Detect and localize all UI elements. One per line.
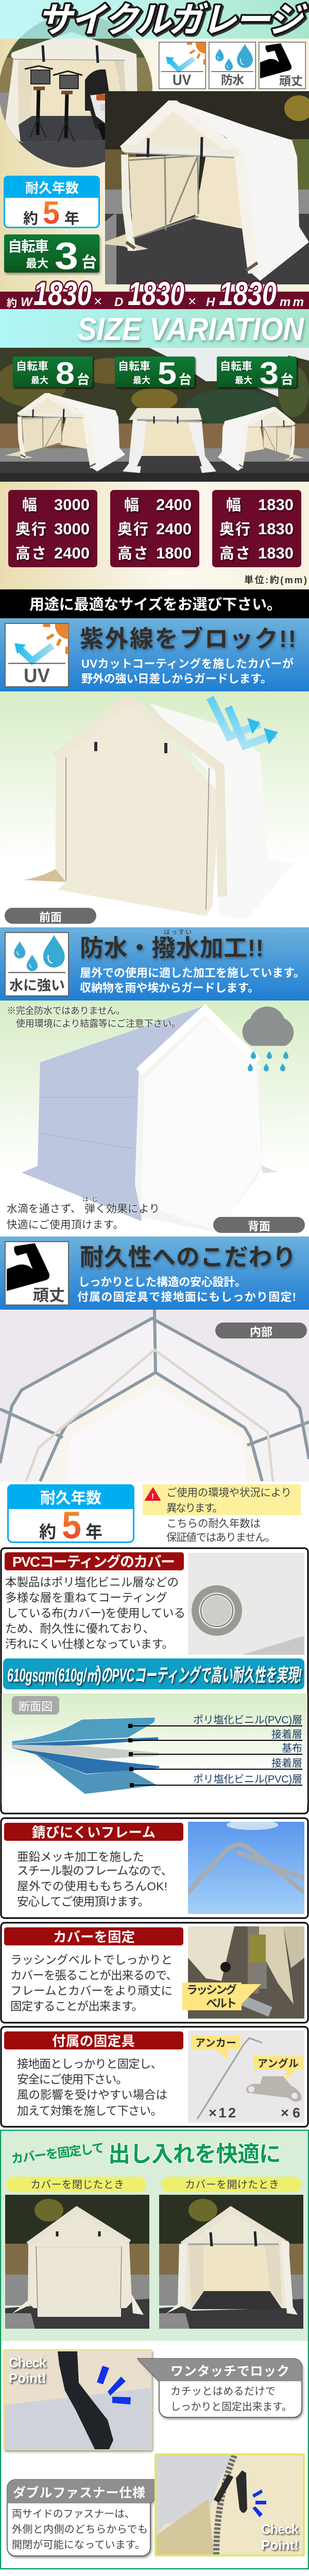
badge: 3 bikes: 台 <box>281 372 294 387</box>
waterproof description <box>80 967 305 994</box>
waterproof description: 屋外での使用に適した加工を施しています。 <box>80 967 305 979</box>
dimension bar: H <box>206 295 215 309</box>
icon: UV <box>159 42 205 89</box>
badge: 5 bikes: 自転車 <box>118 361 150 372</box>
warning note: 保証値ではありません。 <box>166 1532 276 1544</box>
fixtures title <box>4 2031 183 2049</box>
fixing text <box>10 1954 178 2013</box>
size table: 3000: 幅 <box>22 497 37 514</box>
illustration: garage front closed <box>24 698 294 920</box>
icon: water resistant <box>5 933 68 996</box>
size table: 3000: 3000 <box>54 520 90 538</box>
fixing text: カバーを張ることが出来るので、 <box>10 1969 178 1982</box>
bicycle capacity badge: 台 <box>81 254 97 271</box>
waterproof header <box>0 927 309 1001</box>
label: cross section: 断面図 <box>19 1700 53 1713</box>
fixtures text: 風の影響を受けやすい場合は <box>17 2089 167 2102</box>
size table background <box>0 482 309 589</box>
waterproof feature section <box>0 927 309 1233</box>
PVC text: 汚れにくい仕様となっています。 <box>5 1638 174 1651</box>
size table: 3000 <box>8 490 97 567</box>
illustration: garage back <box>22 1006 278 1232</box>
label: back <box>213 1217 305 1233</box>
durability description <box>77 1276 296 1303</box>
UV description <box>81 657 294 685</box>
PVC text: している布(カバー)を使用している <box>6 1607 185 1620</box>
fixing title <box>4 1927 183 1945</box>
icon: UV: UV <box>173 72 192 89</box>
dimension bar <box>0 275 309 312</box>
badge: 5 bikes: 5 <box>158 356 177 391</box>
icon: UV block <box>5 623 68 687</box>
hero cream background <box>0 39 309 292</box>
callout: double zipper <box>7 2480 171 2556</box>
callout: one touch lock <box>138 2359 302 2417</box>
note: not fully waterproof: 使用環境により結露等にご注意下さい。 <box>16 1019 181 1029</box>
diagram labels: 接着層 <box>271 1728 302 1740</box>
dimension bar: mm <box>280 295 304 309</box>
bicycle capacity badge: 3 <box>55 234 78 277</box>
callout: angle <box>253 2056 303 2081</box>
UV feature section <box>0 618 309 924</box>
bicycle capacity badge <box>4 234 99 277</box>
photo: garage with bicycles in circle <box>0 10 154 170</box>
badge: 5 bikes: 台 <box>179 372 192 387</box>
diagram labels <box>193 1714 302 1785</box>
callout: double zipper: 両サイドのファスナーは、 <box>12 2509 135 2520</box>
panel: PVC cover <box>0 1548 309 1815</box>
waterproof caption: 快適にご使用頂けます。 <box>7 1219 124 1231</box>
UV header <box>0 618 309 691</box>
fixtures text: 安全にご使用下さい。 <box>17 2073 128 2086</box>
bicycle capacity badge: 最大 <box>26 257 48 270</box>
dimension bar: × <box>188 293 196 309</box>
check point: buckle: Point! <box>9 2370 46 2386</box>
heading: fix the cover: カバーを固定して <box>10 2141 105 2166</box>
diagram: layers <box>12 1717 159 1794</box>
size table: 1830: 幅 <box>226 497 241 514</box>
panel: DIY and gardening <box>0 2571 309 2576</box>
photo: cover closed <box>5 2195 149 2329</box>
icon: rain cloud <box>243 1007 294 1072</box>
photo: grommet <box>188 1553 304 1655</box>
panel: cover fixing <box>0 1922 309 2024</box>
size table: 1830: 1830 <box>258 496 294 514</box>
callout: double zipper: ダブルファスナー仕様 <box>13 2485 145 2500</box>
size table: 3000: 高さ <box>15 545 46 562</box>
callout: one touch lock: しっかりと固定出来ます。 <box>170 2401 292 2413</box>
black message bar <box>0 589 309 618</box>
diagram labels: ポリ塩化ビニル(PVC)層 <box>193 1714 302 1726</box>
frame text <box>17 1851 173 1908</box>
badge: 3 bikes: 自転車 <box>220 361 252 372</box>
label: cover closed: カバーを閉じたとき <box>30 2179 124 2191</box>
size variation heading band <box>0 309 309 348</box>
badge: 8 bikes <box>13 356 93 391</box>
check point: zipper: Point! <box>261 2537 299 2553</box>
size table: 3000: 奥行 <box>15 521 46 538</box>
bicycle capacity badge: 自転車 <box>8 239 49 255</box>
size table: 1830: 高さ <box>219 545 250 562</box>
diagram labels: 接着層 <box>271 1757 302 1769</box>
callout: anchor <box>191 2036 241 2060</box>
panel: included fixtures <box>0 2026 309 2128</box>
fixture counts: ×12 <box>209 2105 236 2121</box>
PVC text: 本製品はポリ塩化ビニル層などの <box>5 1576 179 1589</box>
cross section background <box>2 1693 307 1805</box>
heading: waterproof: はっすい <box>164 928 192 936</box>
fixture counts <box>209 2105 300 2121</box>
label: front <box>5 908 96 924</box>
callout: lashing belt <box>182 1982 261 2010</box>
size table: 2400: 奥行 <box>117 521 148 538</box>
callout: angle: アングル <box>258 2057 299 2070</box>
dimension bar: W <box>21 295 33 309</box>
callout: lashing belt: ベルト <box>206 1997 237 2010</box>
size table: 1830: 奥行 <box>219 521 250 538</box>
waterproof description: 収納物を雨や埃からガードします。 <box>80 981 259 994</box>
badge: 3 bikes: 3 <box>260 356 279 391</box>
warning note: こちらの耐久年数は <box>166 1518 261 1530</box>
check point: zipper <box>154 2453 305 2556</box>
size table: 3000: 3000 <box>54 496 90 514</box>
durability badge: 5 <box>43 195 60 231</box>
badge: 5 bikes <box>115 356 195 391</box>
durability badge <box>4 176 100 231</box>
warning note: ご使用の環境や状況により <box>166 1487 291 1499</box>
fixtures text: 加えて対策を施して下さい。 <box>17 2105 162 2117</box>
note: not fully waterproof: ※完全防水ではありません。 <box>7 1006 125 1016</box>
PVC title: PVCコーティングのカバー <box>12 1553 175 1570</box>
label: front: 前面 <box>39 911 62 924</box>
hero section <box>0 0 309 309</box>
icon: sturdy block <box>5 1242 68 1305</box>
UV description: 野外の強い日差しからガードします。 <box>81 672 272 685</box>
heading: easy in and out: 出し入れを快適に <box>108 2142 281 2167</box>
label: cross section <box>12 1696 59 1715</box>
fixing text: フレームとカバーをより頑丈に <box>10 1985 173 1997</box>
size table: 2400: 2400 <box>156 520 192 538</box>
PVC banner <box>3 1658 304 1689</box>
photo: cover open <box>159 2195 303 2329</box>
PVC text: ため、耐久性に優れており、 <box>5 1622 154 1635</box>
heading: durability: 耐久性へのこだわり <box>80 1244 296 1270</box>
badge: 8 bikes: 8 <box>56 356 75 391</box>
icon: sturdy: 頑丈 <box>279 74 303 88</box>
icon: sturdy block: 頑丈 <box>33 1286 65 1304</box>
badge: 3 bikes <box>217 356 297 391</box>
panel: rust resistant frame <box>0 1818 309 1919</box>
dimension bar: D <box>114 295 123 309</box>
photo: lashing belt <box>188 1926 304 2019</box>
waterproof caption: 水滴を通さず、 弾く効果により <box>7 1203 160 1215</box>
warning note: ! <box>151 1492 154 1501</box>
warning note: 異なります。 <box>166 1502 223 1514</box>
durability badge large: 約 <box>39 1522 56 1541</box>
badge: 8 bikes: 自転車 <box>16 361 48 372</box>
badge: 8 bikes: 台 <box>77 372 90 387</box>
size table: 1830: 1830 <box>258 520 294 538</box>
heading: waterproof: 防水・撥水加工!! <box>80 935 264 961</box>
title: サイクルガレージ <box>37 1 307 40</box>
badge: 3 bikes: 最大 <box>235 376 252 385</box>
callout: one touch lock: カチッとはめるだけで <box>170 2386 276 2397</box>
icon: UV block: UV <box>24 665 50 687</box>
frame text: 安心してご使用頂けます。 <box>17 1895 149 1908</box>
size table: 2400: 幅 <box>124 497 139 514</box>
durability description: しっかりとした構造の安心設計。 <box>78 1276 246 1289</box>
waterproof caption: はじ <box>82 1196 98 1203</box>
callout: double zipper: 外側と内側のどちらからでも <box>12 2523 148 2535</box>
fixing text: ラッシングベルトでしっかりと <box>10 1954 173 1967</box>
size variation section <box>0 309 309 618</box>
durability badge large: 5 <box>62 1504 81 1546</box>
check point: zipper: Check <box>261 2521 299 2537</box>
durability feature section <box>0 1236 309 1546</box>
waterproof caption <box>7 1196 160 1231</box>
icon: sturdy <box>259 42 305 89</box>
photo: frame against sky <box>188 1822 304 1914</box>
label: cover closed <box>6 2177 146 2192</box>
label: cover open <box>161 2177 301 2192</box>
durability header <box>0 1236 309 1310</box>
illustration: UV rays reflected <box>210 698 278 745</box>
durability badge large <box>7 1484 134 1547</box>
PVC text <box>5 1576 185 1651</box>
label: interior: 内部 <box>250 1326 272 1338</box>
top gradient band <box>0 0 309 39</box>
dimension bar: × <box>94 293 102 309</box>
callout: lashing belt: ラッシング <box>186 1984 237 1996</box>
fixing title: カバーを固定 <box>53 1929 135 1945</box>
photo: interior frame <box>0 1310 309 1482</box>
UV panel background <box>0 691 309 927</box>
unit note: 単位:約(mm) <box>244 574 307 585</box>
diagram labels: ポリ塩化ビニル(PVC)層 <box>193 1773 302 1785</box>
badge: 5 bikes: 最大 <box>133 376 150 385</box>
photo: three garages <box>0 348 309 482</box>
UV description: UVカットコーティングを施したカバーが <box>81 657 294 670</box>
durability badge large: 耐久年数 <box>40 1490 101 1507</box>
frame text: スチール製のフレームなので、 <box>17 1865 173 1877</box>
durability badge: 年 <box>64 210 79 227</box>
fixtures text: 接地面としっかりと固定し、 <box>17 2058 162 2071</box>
black message bar: 用途に最適なサイズをお選び下さい。 <box>29 596 282 613</box>
fixtures text <box>17 2058 167 2117</box>
check point: buckle: Check <box>9 2355 47 2370</box>
callout: double zipper: 開閉が可能になっています。 <box>12 2539 145 2551</box>
size table: 3000: 2400 <box>54 544 90 562</box>
size table: 1830: 1830 <box>258 544 294 562</box>
warning note <box>143 1484 301 1544</box>
waterproof panel background <box>0 1001 309 1236</box>
heading: UV block: 紫外線をブロック!! <box>80 625 296 652</box>
icon: water resistant: 水に強い <box>9 978 65 993</box>
label: back: 背面 <box>248 1220 270 1233</box>
frame title: 錆びにくいフレーム <box>32 1825 156 1840</box>
label: interior <box>215 1323 307 1338</box>
fixing text: 固定することが出来ます。 <box>10 2000 143 2013</box>
note: not fully waterproof <box>7 1006 181 1029</box>
photo: garage hero <box>105 91 309 284</box>
badge: 8 bikes: 最大 <box>31 376 48 385</box>
callout: one touch lock: ワンタッチでロック <box>170 2364 289 2379</box>
icon: waterproof <box>209 42 255 89</box>
panel: easy access <box>0 2130 309 2570</box>
diagram labels: 基布 <box>282 1742 302 1754</box>
icon: waterproof: 防水 <box>221 73 244 87</box>
size table: 2400: 1800 <box>156 544 192 562</box>
easy access background <box>1 2131 308 2341</box>
fixtures title: 付属の固定具 <box>52 2033 135 2049</box>
fixture counts: ×6 <box>281 2105 300 2121</box>
frame title <box>4 1823 183 1841</box>
dimension bar: 約 <box>7 297 17 309</box>
check point: buckle <box>4 2349 152 2450</box>
durability description: 付属の固定具で接地面にもしっかり固定! <box>77 1291 296 1303</box>
frame text: 亜鉛メッキ加工を施した <box>17 1851 144 1863</box>
size table: 2400 <box>110 490 199 567</box>
size table: 2400: 高さ <box>117 545 148 562</box>
callout: anchor: アンカー <box>195 2038 236 2049</box>
diagram: leader lines <box>129 1724 302 1787</box>
label: cover open: カバーを開けたとき <box>185 2179 279 2191</box>
durability badge large: 年 <box>85 1522 102 1541</box>
durability badge: 耐久年数 <box>25 180 79 196</box>
PVC text: 多様な層を重ねてコーティング <box>5 1591 167 1604</box>
frame text: 屋外での使用ももちろんOK! <box>17 1880 167 1893</box>
durability badge: 約 <box>23 210 38 227</box>
size table: 1830 <box>212 490 301 567</box>
size table: 2400: 2400 <box>156 496 192 514</box>
photo: anchor and angle <box>188 2030 304 2123</box>
